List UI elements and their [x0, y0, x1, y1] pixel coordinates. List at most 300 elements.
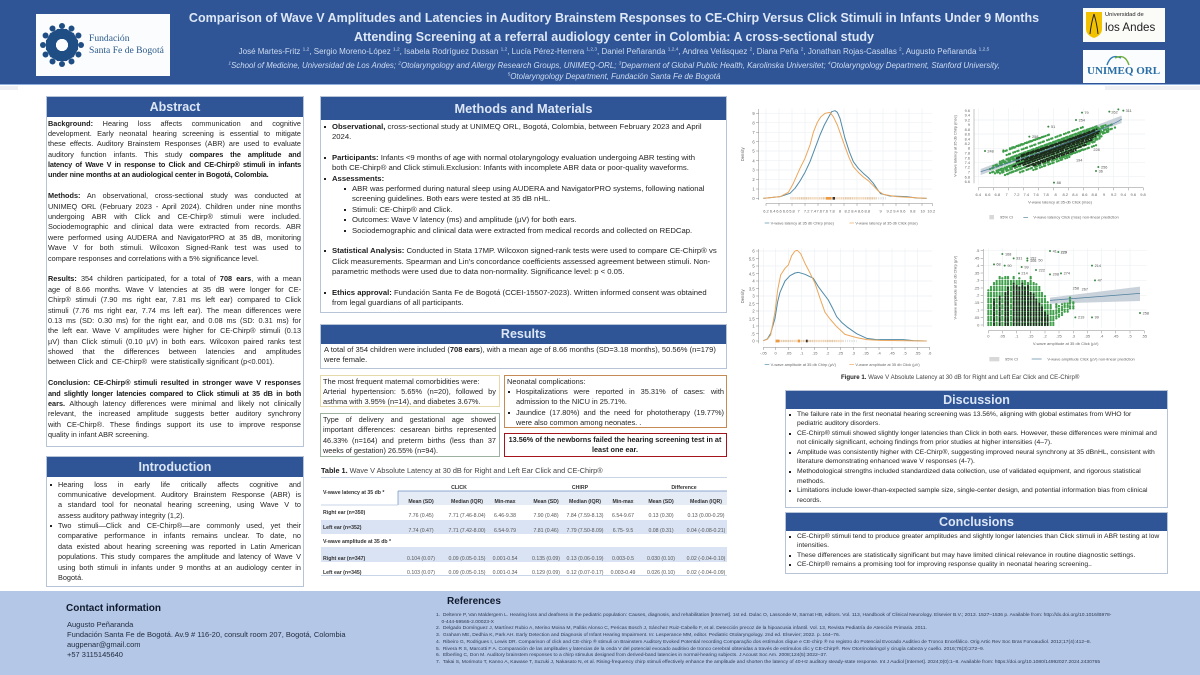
chart: scatter of wave V latency: 9.2 — [965, 118, 970, 122]
table: wave V latency and amplitude: 7.81 (0.46) — [533, 528, 559, 534]
chart: scatter of wave V latency: 194 — [1076, 159, 1083, 163]
chart: scatter of wave V latency: 228 — [1093, 148, 1100, 152]
table: wave V latency and amplitude: 0.09 (0.05-0.15) — [449, 556, 486, 562]
icon: Andes shield — [1086, 12, 1102, 38]
text: abstract body: relevant, the increased amplitude suggests better auditory synchrony — [48, 409, 301, 418]
chart: density of wave V amplitude: .05 — [786, 350, 792, 355]
chart: density of wave V amplitude: 2 — [752, 309, 755, 314]
chart: scatter of wave V amplitude: 41 — [1053, 249, 1057, 253]
table: wave V latency and amplitude: 7.74 (0.47) — [408, 528, 434, 534]
chart: scatter of wave V latency: 9 — [968, 123, 970, 127]
box: delivery and gestational age — [320, 413, 500, 457]
chart: density of wave V amplitude: .1 — [800, 350, 804, 355]
logo text large: los Andes — [1105, 21, 1155, 34]
text: abstract body: age of 8.66 months. Wave V latencies at 35 dB were longer for CE- — [48, 285, 301, 294]
text: methods body: from legal guardians of all participants. — [332, 298, 464, 307]
logo: UNIMEQ ORL — [1083, 50, 1165, 83]
affiliations: 5Otolaryngology Department, Fundación Santa Fe de Bogotá — [508, 72, 720, 80]
chart: scatter of wave V amplitude: .3 — [1072, 334, 1076, 339]
heading: methods — [321, 97, 726, 120]
table: wave V latency and amplitude: 0.026 (0.10) — [647, 570, 675, 576]
heading: references: References — [447, 596, 501, 607]
text: abstract body: Chirp® stimuli (7.90 ms right ear, 7.81 ms left ear) compared to Click — [48, 295, 301, 304]
chart: density of wave V latency: 6.2 — [763, 208, 770, 213]
chart: scatter of wave V amplitude: 208 — [1053, 273, 1059, 277]
text: abstract body: with CE-Chirp®. These findings support its use to improve response — [48, 420, 301, 429]
chart: scatter of wave V amplitude: 99 — [1024, 265, 1029, 269]
logo: Universidad de los Andes — [1083, 8, 1165, 42]
chart: density of wave V amplitude: 4.5 — [749, 271, 755, 276]
chart: scatter of wave V latency: 6.4 — [976, 192, 982, 197]
chart: scatter of wave V amplitude: 99 — [1095, 316, 1099, 320]
chart: density of wave V latency: V-wave latency at 35 db Chirp (mse) — [771, 220, 835, 225]
reference list: 2. Delgado Domínguez J, Martínez Rubio A, Merino Moina M, Pallás Alonso C, Pericas Bosch J, Sánchez Ruiz-Cabello F, et al. Detección precoz de la hipoacusia infantil. Vol. 13, Revista Pediatría de Atención Primaria. 2011. — [436, 626, 927, 631]
chart: density of wave V latency: 7.8 — [829, 208, 836, 213]
chart: scatter of wave V latency: 7.8 — [965, 151, 970, 155]
text: discussion body: records. — [797, 497, 821, 504]
chart: density of wave V amplitude: .2 — [826, 350, 830, 355]
chart: density of wave V amplitude: 0 — [775, 350, 778, 355]
chart: density of wave V latency: 6.6 — [776, 208, 783, 213]
heading: conclusions: Conclusions — [939, 515, 1014, 529]
chart: scatter of wave V latency: 51 — [1051, 125, 1055, 129]
chart: scatter of wave V latency — [954, 108, 1147, 220]
chart: density of wave V amplitude: .45 — [889, 350, 896, 355]
chart: density of wave V amplitude: .55 — [915, 350, 921, 355]
chart: scatter of wave V amplitude: .1 — [1015, 334, 1019, 339]
chart: density of wave V latency: 7.6 — [823, 208, 829, 213]
chart: density of wave V amplitude: V-wave amplitude at 35 db Click (µV) — [855, 362, 920, 367]
table: wave V latency and amplitude: Median (IQR) — [451, 499, 483, 505]
table: wave V latency and amplitude: Left ear (n=352) — [323, 525, 362, 531]
table: wave V latency and amplitude: 7.79 (7.50-8.09) — [567, 528, 604, 534]
chart: density of wave V amplitude: 6 — [752, 249, 755, 254]
chart: scatter of wave V amplitude: 229 — [1061, 250, 1067, 254]
text: abstract body: these effects. Auditory Brainstem Responses (ABR) are used to evaluate — [48, 139, 301, 148]
reference list: 7. Takai S, Morimoto T, Kanno A, Kawase T, Suzuki J, Nakasato N, et al. Rising-frequency chirp stimuli effectively enhance the amplitude and shorten the latency of 40-Hz auditory steady-state response. Int J Audiol [Internet]. 2024;0(0):1–8. Available from: https://doi.org/10.1080/14992027.2024.2430765 — [436, 660, 1100, 665]
box: neonatal complications: Jaundice (17.80%) and the need for phototherapy (19.77%) — [516, 408, 724, 417]
chart: scatter of wave V amplitude: .5 — [1128, 334, 1132, 339]
chart: density of wave V latency: 8.4 — [851, 208, 858, 213]
chart: density of wave V amplitude: 3 — [752, 294, 755, 299]
heading: results: Results — [501, 327, 546, 341]
text: discussion body: Limitations include lower-than-expected sample size, single-center design, and potential information bias from clinical — [797, 487, 1148, 494]
chart: density of wave V latency: 9.6 — [900, 208, 906, 213]
chart: scatter of wave V amplitude: .35 — [1085, 334, 1091, 339]
chart: scatter of wave V latency: 6.6 — [985, 192, 991, 197]
table: wave V latency and amplitude: Right ear (n=350) — [323, 510, 366, 516]
text: methods body: screening guidelines. Both ears were tested at 35 dB nHL. — [352, 194, 550, 203]
chart: density of wave V amplitude: .25 — [838, 350, 844, 355]
contact information: Fundación Santa Fe de Bogotá. Av.9 # 116-20, consult room 207, Bogotá, Colombia — [67, 630, 346, 639]
chart: density of wave V amplitude: .15 — [812, 350, 818, 355]
chart: density of wave V latency: 7 — [752, 130, 755, 135]
panel: conclusions — [785, 512, 1168, 574]
chart: scatter of wave V amplitude: .05 — [974, 315, 980, 320]
chart: scatter of wave V latency: 8.4 — [1072, 192, 1079, 197]
chart: scatter of wave V latency: 8.2 — [1063, 192, 1069, 197]
chart: density of wave V amplitude: .35 — [863, 350, 870, 355]
title: Comparison of Wave V Amplitudes and Latencies in Auditory Brainstem Responses to CE-Chirp Versus Click Stimuli in Infants Under 9 Months — [189, 11, 1039, 25]
chart: density of wave V amplitude: .6 — [928, 350, 932, 355]
reference list: 1. Deltenre P, Van Maldergem L. Hearing loss and deafness in the pediatric population: Causes, diagnosis, and rehabilitation [Internet]. 1st ed. Dulac O, Lassonde M, Sarnat HB, editors. Vol. 113, Handbook of Clinical Neurology. Elsevier B.V.; 2013. 1527–1536 p. Available from: http://dx.doi.org/10.1016/B978- — [436, 613, 1111, 618]
chart: scatter of wave V amplitude: .2 — [976, 293, 980, 298]
reference list: 6. Elberling C, Don M. Auditory brainstem responses to a chirp stimulus designed from derived-band latencies in normal-hearing subjects. J Acoust Soc Am. 2008;124(5):3022–37. — [436, 653, 827, 658]
table: wave V latency and amplitude: 6.54-9.67 — [612, 513, 634, 519]
chart: density of wave V latency: 1 — [752, 187, 755, 192]
text: abstract body: and slightly longer latencies compared to Click stimuli at 35 dB in both — [48, 389, 301, 398]
text: conclusions body: CE-Chirp® remains a promising tool for improving response quality in neonatal hearing screening.. — [797, 561, 1092, 568]
text: conclusions body — [789, 532, 1160, 568]
box: neonatal complications: were also common among neonates. . — [516, 418, 641, 427]
heading: discussion: Discussion — [943, 393, 1010, 407]
text: abstract body: ears. Although latency differences were minimal and likely not clinically — [48, 399, 301, 408]
chart: density of wave V latency: Density — [740, 146, 745, 161]
text: abstract body: auditory function infants. This study compares the amplitude and — [48, 150, 301, 159]
box: neonatal complications: Neonatal complications: — [507, 376, 585, 386]
box: neonatal complications — [504, 375, 727, 428]
text: abstract body — [48, 118, 301, 439]
chart: scatter of wave V amplitude: 331 — [1016, 257, 1022, 261]
table: wave V latency and amplitude: 7.84 (7.59-8.13) — [567, 513, 604, 519]
chart: scatter of wave V amplitude: .25 — [1056, 334, 1063, 339]
table: wave V latency and amplitude: Mean (SD) — [533, 499, 559, 505]
text: abstract body: Results: 354 children participated, for a total of 708 ears, with a mean — [48, 274, 301, 283]
chart: scatter of wave V latency: 8.4 — [965, 137, 971, 141]
table: wave V latency and amplitude: 0.13 (0.00-0.29) — [688, 513, 725, 519]
chart: density of wave V amplitude: .4 — [877, 350, 881, 355]
chart: scatter of wave V amplitude: .35 — [974, 270, 980, 275]
icon: arcs — [1106, 56, 1130, 66]
chart: scatter of wave V amplitude: .45 — [1113, 334, 1119, 339]
chart: density of wave V amplitude: .3 — [852, 350, 856, 355]
chart: scatter of wave V latency: V-wave latency at 35 db Chirp (mse) — [954, 114, 958, 177]
chart: density of wave V latency: 5.8 — [789, 208, 796, 213]
chart: density of wave V amplitude: V-wave amplitude at 35 db Chirp (µV) — [771, 362, 837, 367]
chart: scatter of wave V amplitude: .4 — [1100, 334, 1104, 339]
text: introduction body: communicative development. Auditory Brainstem Response (ABR) is — [58, 490, 301, 499]
chart: scatter of wave V latency: 9 — [1103, 192, 1106, 197]
title: Attending Screening at a referral audiology center in Colombia: A cross-sectional study — [354, 30, 874, 44]
text: methods body: 2024. — [332, 132, 351, 141]
chart: scatter of wave V amplitude: V-wave amplitude at 35 db Chirp (µV) — [954, 255, 958, 320]
chart: scatter of wave V latency: 7.4 — [1024, 192, 1030, 197]
table: wave V latency and amplitude: V-wave latency at 35 db * — [323, 490, 385, 496]
text: discussion body: literature demonstrating enhanced wave V responses (4-7). — [797, 458, 975, 465]
chart: density of wave V latency: 6.4 — [770, 208, 776, 213]
chart: scatter of wave V latency: 9.8 — [1140, 192, 1147, 197]
text: conclusions body: These differences are statistically significant but may have limited clinical relevance in routine diagnostic settings. — [797, 552, 1135, 559]
text: methods body: Sociodemographic and clinical data were extracted from medical records and collected on REDCap. — [352, 226, 692, 235]
chart: scatter of wave V latency: 256 — [1101, 165, 1107, 169]
chart: scatter of wave V amplitude: 267 — [1082, 288, 1088, 292]
chart: density of wave V latency: 6 — [752, 139, 755, 144]
text: methods body: parametric methods were used due to data non-normality. Significance level: p < 0.05. — [332, 267, 624, 276]
text: methods body — [324, 122, 717, 307]
text: methods body: Stimuli: CE-Chirp® and Click. — [352, 205, 453, 214]
chart: scatter of wave V latency: 7.6 — [965, 156, 970, 160]
text: methods body: Ethics approval: Fundación Santa Fe de Bogotá (CCEI-15507-2023). Written informed consent was obtained — [332, 288, 707, 297]
chart: scatter of wave V amplitude: .5 — [976, 248, 980, 253]
chart: density of wave V latency: 10.2 — [927, 208, 936, 213]
text: discussion body: The failure rate in the first neonatal hearing screening was 13.56%, aligning with global estimates from WHO for — [797, 410, 1131, 418]
chart: scatter of wave V amplitude: .45 — [974, 256, 980, 261]
text: abstract body: between Click and CE-Chirp® were statistically significant (p<0.001). — [48, 357, 274, 366]
chart: scatter of wave V amplitude: 222 — [1039, 268, 1045, 272]
chart: scatter of wave V latency: 9.4 — [1121, 192, 1127, 197]
chart: scatter of wave V latency: V-wave latency at 35-db Click (mse) — [1028, 199, 1093, 204]
table: wave V latency and amplitude: 6.54-9.79 — [494, 528, 516, 534]
text: methods body: Outcomes: Wave V latency (ms) and amplitude (µV) for both ears. — [352, 215, 577, 224]
table: wave V latency and amplitude: Right ear (n=347) — [323, 556, 366, 562]
chart: density of wave V latency: 7 — [798, 208, 801, 213]
table: wave V latency and amplitude — [321, 477, 727, 576]
box: maternal comorbidities: Arterial hypertension: 5.65% (n=20), followed by — [323, 387, 496, 396]
chart: density of wave V latency: 2 — [752, 177, 755, 182]
icon: ring of figures — [40, 23, 84, 67]
panel: results — [320, 324, 727, 369]
chart: density of wave V latency: 7.4 — [811, 208, 817, 213]
text: introduction body — [50, 480, 301, 582]
reference list — [436, 612, 1112, 665]
table: wave V latency and amplitude: 0.001-0.54 — [493, 556, 518, 562]
reference list: 3. Graham ME, Dedhia K, Park AH. Early Detection and Diagnosis of Infant Hearing Impairment. In: Lesperance MM, editor. Pediatric Otolaryngology. 2nd ed. Elsevier; 2022. p. 164–76. — [436, 633, 840, 638]
chart: density of wave V latency: 8 — [752, 120, 755, 125]
chart: density of wave V latency: V-wave latency at 35 db Click (mse) — [855, 220, 918, 225]
panel: introduction — [46, 456, 304, 587]
chart: scatter of wave V amplitude: 258 — [1073, 286, 1079, 290]
text: methods body: Observational, cross-sectional study at UNIMEQ ORL, Bogotá, Colombia, between February 2023 and April — [332, 122, 702, 130]
chart: scatter of wave V amplitude: 214 — [1021, 272, 1029, 276]
logo text: UNIMEQ ORL — [1087, 65, 1160, 77]
chart: scatter of wave V latency: 79 — [1084, 111, 1089, 115]
heading: introduction — [47, 457, 303, 477]
references — [436, 596, 1112, 665]
chart: scatter of wave V amplitude: 47 — [1098, 279, 1102, 283]
text: introduction body: Bogotá. — [58, 573, 83, 582]
chart: scatter of wave V amplitude: .05 — [1000, 334, 1006, 339]
text: methods body: Assessments: — [332, 174, 384, 183]
chart: density of wave V latency: 5 — [752, 149, 755, 154]
chart: density of wave V latency: 9 — [880, 208, 883, 213]
panel: abstract — [46, 96, 304, 447]
chart: scatter of wave V amplitude: 0 — [987, 334, 990, 339]
chart: density of wave V latency: 9 — [752, 111, 755, 116]
chart: density of wave V latency: 3 — [752, 168, 755, 173]
text: introduction body: data existed about hearing screening was reported in Latin American — [58, 542, 301, 551]
header banner — [0, 0, 1200, 85]
heading: conclusions — [786, 513, 1167, 531]
table: wave V latency and amplitude: 0.02 (-0.04-0.10) — [687, 556, 726, 562]
chart: scatter of wave V amplitude: .3 — [976, 278, 980, 283]
chart: density of wave V latency: 8 — [839, 208, 842, 213]
chart: density of wave V amplitude: .5 — [751, 331, 755, 336]
heading: abstract — [47, 97, 303, 117]
table: wave V latency and amplitude: 0.12 (0.07-0.17) — [567, 570, 604, 576]
chart: scatter of wave V amplitude: 0 — [977, 322, 980, 327]
authors: José Martes-Fritz 1,2, Sergio Moreno-López 1,2, Isabela Rodríguez Dussan 1,2, Lucía Pérez-Herrera 1,2,3, Daniel Peñaranda 1,2,4, Andrea Velásquez 2, Diana Peña 2, Jonathan Rojas-Casallas 2, Augusto Peñaranda 1,2,5 — [239, 47, 989, 56]
reference list: 0-444-59565-2.00023-X — [441, 620, 494, 625]
text: methods body: Click measurements. Spearman and Lin's concordance coefficients assessed agreement between stimuli. Non- — [332, 257, 710, 266]
chart: density of wave V latency — [740, 108, 936, 226]
chart: scatter of wave V amplitude: .4 — [976, 263, 980, 268]
chart: scatter of wave V latency: 95% CI — [1000, 215, 1013, 220]
chart: density of wave V latency: 9.2 — [887, 208, 893, 213]
panel: methods and materials — [320, 96, 727, 313]
table: wave V latency and amplitude: 7.76 (0.45) — [408, 513, 434, 519]
table: wave V latency and amplitude: Median (IQR) — [569, 499, 601, 505]
text: abstract body: stimuli (7.76 ms right ear, 7.74 ms left ear). The mean differences were — [48, 306, 301, 315]
table: wave V latency and amplitude: 0.129 (0.09) — [532, 570, 560, 576]
chart: density of wave V latency: 7.6 — [817, 208, 823, 213]
chart: density of wave V amplitude: 2.5 — [749, 301, 755, 306]
text: abstract body: Sociodemographic and clinical data were extracted from records. ABR — [48, 222, 301, 231]
table: wave V latency and amplitude: 0.103 (0.07) — [407, 570, 435, 576]
chart: scatter of wave V amplitude: 274 — [1064, 272, 1071, 276]
text: abstract body: Methods: An observational, cross-sectional study was conducted at — [48, 191, 301, 200]
table: wave V latency and amplitude: 0.04 (-0.08-0.21) — [687, 528, 726, 534]
footer band — [0, 591, 1200, 675]
text: abstract body: 0.13 ms (SD: 0.30 ms) for the right ear, and 0.08 ms (SD: 0.31 ms) for — [48, 316, 301, 325]
chart: scatter of wave V amplitude: V-wave amplitude at 35 db Click (µV) — [1033, 341, 1099, 346]
chart: scatter of wave V amplitude: .2 — [1043, 334, 1047, 339]
text: results summary — [324, 345, 716, 364]
logo wordmark: Fundación — [89, 33, 130, 44]
chart: density of wave V amplitude: 0 — [752, 339, 755, 344]
chart: scatter of wave V latency: 7.6 — [1033, 192, 1040, 197]
box: delivery and gestational age: important differences: cesarean births represented — [323, 425, 496, 434]
chart: density of wave V latency: 7.2 — [804, 208, 810, 213]
table: wave V latency and amplitude: CHIRP — [572, 485, 589, 491]
text: abstract body: development. Early neonatal hearing screening is essential to mitigate — [48, 129, 301, 138]
text: discussion body: methods. — [797, 478, 825, 485]
text: discussion body: Amplitude was consistently higher with CE-Chirp®, suggesting improved neural synchrony at 35 dBnHL, consistent with — [797, 449, 1155, 456]
corner tint left — [0, 86, 18, 90]
chart: scatter of wave V amplitude: .1 — [976, 307, 980, 312]
chart: density of wave V amplitude: 1.5 — [749, 316, 755, 321]
chart: scatter of wave V latency: 6.8 — [965, 175, 970, 179]
chart: density of wave V latency: 0 — [752, 196, 755, 201]
callout: failed hearing screening: 13.56% of the newborns failed the hearing screening test in at — [509, 435, 721, 444]
text: introduction body: populations. This study compares the amplitude and latency of Wave V — [58, 552, 301, 561]
text: methods body: both CE-Chirp® and Click stimuli.Exclusion: Infants with incomplete ABR data or poor-quality waveforms. — [332, 163, 689, 172]
chart: scatter of wave V latency: 88 — [1057, 181, 1061, 185]
text: discussion body: CE-Chirp® stimuli showed slightly longer latencies than Click in both ears. However, these differences were minimal and — [797, 430, 1157, 437]
table: wave V latency and amplitude: 7.90 (0.48) — [533, 513, 559, 519]
text: introduction body: a standard tool for neonatal hearing screening, using Wave V to — [58, 500, 301, 509]
chart: density of wave V latency: 4 — [752, 158, 755, 163]
chart: density of wave V latency: 6.6 — [783, 208, 789, 213]
callout: failed hearing screening — [504, 433, 727, 457]
text: abstract body: µV) than Click stimuli (0.10 µV) in both ears. Wilcoxon paired ranks test — [48, 337, 301, 346]
chart: scatter of wave V amplitude: V-wave amplitude Click (µV) non-linear prediction — [1047, 356, 1135, 361]
chart: scatter of wave V amplitude: .25 — [974, 285, 980, 290]
chart: density of wave V amplitude: -.05 — [760, 350, 768, 355]
logo: Fundación Santa Fe de Bogotá — [36, 14, 170, 76]
chart: scatter of wave V latency: 7.8 — [1043, 192, 1050, 197]
text: abstract body: latency of Wave V in response to Click and CE-Chirp® stimuli in infants — [48, 160, 301, 169]
text: methods body: ABR was performed during natural sleep using AUDERA and NavigatorPRO systems, following national — [352, 184, 705, 193]
text: abstract body: undergoing ABR with Click and CE-Chirp® stimuli were included. — [48, 212, 301, 221]
box: delivery and gestational age: Type of delivery and gestational age showed — [323, 415, 496, 424]
chart: scatter of wave V latency: 8 — [968, 147, 970, 151]
text: conclusions body: intensities. — [797, 542, 829, 549]
table: wave V latency and amplitude: 0.09 (0.05-0.15) — [449, 570, 486, 576]
table: wave V latency and amplitude: 6.46-9.38 — [494, 513, 516, 519]
reference list: 4. Ribeiro G, Rodrigues I, Lewis DR. Comparison of click and CE-chirp ® stimuli on Brainstem Auditory Evoked Potential recording Comparação dos estímulos clique e CE-chirp ® no registro do Potencial Evocado Auditivo de Tronco Encefálico. Orig Artic Rev Soc Bras Fonoaudiol. 2012;17(4):412–8. — [436, 640, 1091, 645]
chart: scatter of wave V latency: 262 — [1111, 110, 1118, 114]
chart: scatter of wave V latency: 258 — [1032, 135, 1038, 139]
chart: scatter of wave V amplitude: 219 — [1078, 316, 1084, 320]
text: results summary: were female. — [324, 355, 367, 364]
chart: scatter of wave V latency: 7 — [1006, 192, 1009, 197]
contact information: Augusto Peñaranda — [67, 620, 133, 629]
title — [189, 11, 1039, 44]
chart: scatter of wave V amplitude: .15 — [1028, 334, 1034, 339]
chart: scatter of wave V latency: 9.4 — [965, 114, 971, 118]
text: introduction body: Hearing loss in early life critically affects cognitive and — [58, 480, 301, 488]
table: wave V latency and amplitude: 0.003-0.49 — [611, 570, 636, 576]
table: wave V latency and amplitude: Left ear (n=345) — [323, 570, 362, 576]
box: maternal comorbidities — [320, 375, 500, 407]
box: delivery and gestational age: 46.33% (n=164) and preterm births (less than 37 — [323, 436, 496, 445]
chart: scatter of wave V latency: 8.8 — [1092, 192, 1098, 197]
chart: scatter of wave V amplitude: 214 — [1095, 264, 1102, 268]
chart: density of wave V amplitude: 5.5 — [749, 256, 755, 261]
text: introduction body: Two stimuli—Click and CE-Chirp®—are commonly used, yet their — [58, 521, 301, 530]
table: wave V latency and amplitude: V-wave amplitude at 35 db * — [323, 539, 392, 545]
table: wave V latency and amplitude: Mean (SD) — [408, 499, 434, 505]
affiliations — [228, 61, 1000, 80]
heading: discussion — [786, 391, 1167, 409]
chart: scatter of wave V amplitude: 50 — [1038, 258, 1043, 262]
box: neonatal complications: admission to the NICU in 25.71%. — [516, 397, 627, 406]
chart: density of wave V latency: 9.8 — [910, 208, 916, 213]
text: methods body: Statistical Analysis: Conducted in Stata 17MP. Wilcoxon signed-rank tests were used to compare CE-Chirp® vs — [332, 246, 717, 255]
text: discussion body — [789, 410, 1157, 504]
chart: scatter of wave V latency: 248 — [987, 149, 994, 153]
table: wave V latency and amplitude: 0.001-0.34 — [493, 570, 518, 576]
chart: density of wave V amplitude: .5 — [903, 350, 907, 355]
text: introduction body: using both stimuli in infants under 9 months at an audiology center in — [58, 563, 301, 572]
logo text: Universidad de — [1105, 12, 1144, 18]
text: discussion body: not clinically significant, echoing findings from prior studies at higher intensities (4–7). — [797, 439, 1052, 446]
text: abstract body: the left ear. Wave V amplitudes were higher for CE-Chirp® stimuli (0.13 — [48, 326, 301, 335]
affiliations: 1School of Medicine, Universidad de Los Andes; 2Otolaryngology and Allergy Research Groups, UNIMEQ-ORL; 3Deparment of Global Public Health, Karolinska Universitet; 4Otolaryngology Department, Stanford University, — [228, 61, 1000, 70]
text: methods body: Participants: Infants <9 months of age with normal otolaryngology evaluation undergoing ABR testing with — [332, 153, 695, 162]
chart: scatter of wave V latency: 6.8 — [995, 192, 1001, 197]
chart: density of wave V latency: 10 — [920, 208, 926, 213]
chart: scatter of wave V latency: 8.6 — [965, 133, 970, 137]
table: wave V latency and amplitude: 0.02 (-0.04-0.09) — [687, 570, 726, 576]
chart: scatter of wave V latency: 7.2 — [965, 166, 970, 170]
text: abstract body: Conclusion: CE-Chirp® stimuli resulted in stronger wave V responses — [48, 378, 301, 387]
chart: scatter of wave V latency: 7.2 — [1014, 192, 1020, 197]
chart: density of wave V amplitude: Density — [740, 288, 745, 303]
text: results summary: A total of 354 children were included (708 ears), with a mean age of 8.66 months (SD=3.18 months), 50.56% (n=179) — [324, 345, 716, 354]
table: wave V latency and amplitude: 0.135 (0.09) — [532, 556, 560, 562]
chart: density of wave V latency: 9.4 — [893, 208, 900, 213]
chart: scatter of wave V amplitude: 106 — [1030, 259, 1036, 263]
chart: scatter of wave V latency: 8.2 — [965, 142, 970, 146]
chart: scatter of wave V amplitude: 258 — [1143, 311, 1149, 315]
logo wordmark — [89, 33, 164, 56]
table: wave V latency and amplitude: Min-max — [494, 499, 516, 505]
table: wave V latency and amplitude: Difference — [671, 485, 697, 491]
callout: failed hearing screening: least one ear. — [592, 445, 638, 454]
text: abstract body: under nine months at an audiological center in Bogotá, Colombia. — [48, 170, 269, 179]
heading: methods: Methods and Materials — [455, 101, 592, 116]
